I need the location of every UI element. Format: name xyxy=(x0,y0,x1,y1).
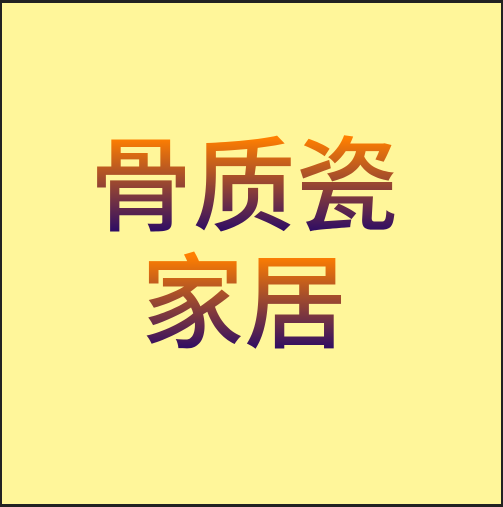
title line 1: 骨质瓷 xyxy=(90,130,398,244)
title line 2: 家居 xyxy=(141,246,347,362)
